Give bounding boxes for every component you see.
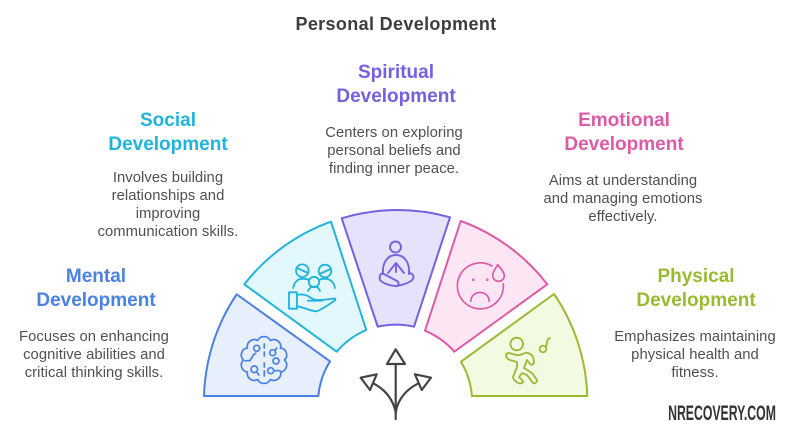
- text: social: improving: [136, 206, 200, 222]
- text: social: [98, 170, 238, 240]
- text: mental: cognitive abilities and: [23, 347, 165, 363]
- heading: physical: [636, 266, 756, 311]
- heading: mental: Mental: [66, 266, 126, 287]
- text: social: communication skills.: [98, 224, 238, 240]
- heading: emotional: Emotional: [578, 110, 670, 131]
- text: spiritual: [325, 125, 463, 177]
- text: emotional: [544, 173, 702, 225]
- panel: spiritual segment: [342, 210, 450, 327]
- heading: mental: Development: [36, 290, 156, 311]
- text: mental: critical thinking skills.: [25, 365, 163, 381]
- text: emotional: Aims at understanding: [549, 173, 697, 189]
- heading: social: [108, 110, 228, 155]
- heading: spiritual: Spiritual: [358, 62, 434, 83]
- icon: running figure with music note: [506, 338, 550, 383]
- text: mental: Focuses on enhancing: [19, 329, 169, 345]
- panel: emotional segment: [425, 221, 547, 352]
- heading: emotional: [564, 110, 684, 155]
- icon: brain: [241, 337, 287, 383]
- text: spiritual: Centers on exploring: [325, 125, 463, 141]
- heading: emotional: Development: [564, 134, 684, 155]
- heading: mental: [36, 266, 156, 311]
- heading: social: Social: [140, 110, 196, 131]
- text: spiritual: personal beliefs and: [327, 143, 461, 159]
- text: social: Involves building: [113, 170, 223, 186]
- text: physical: fitness.: [671, 365, 719, 381]
- heading: spiritual: Development: [336, 86, 456, 107]
- heading: physical: Physical: [657, 266, 735, 287]
- heading: physical: Development: [636, 290, 756, 311]
- text: physical: [614, 329, 776, 381]
- panel: mental segment: [204, 294, 330, 396]
- text: emotional: and managing emotions: [544, 191, 702, 207]
- icon: three-way arrow: [361, 349, 431, 419]
- title: Personal Development: [295, 14, 497, 34]
- icon: meditation: [380, 242, 413, 286]
- logo text: NRECOVERY.COM: [668, 401, 776, 425]
- text: physical: Emphasizes maintaining: [614, 329, 776, 345]
- text: spiritual: finding inner peace.: [329, 161, 459, 177]
- panel: physical segment: [461, 294, 587, 396]
- heading: spiritual: [336, 62, 456, 107]
- text: physical: physical health and: [631, 347, 759, 363]
- heading: social: Development: [108, 134, 228, 155]
- text: mental: [19, 329, 169, 381]
- icon: sad face with drop: [457, 263, 504, 309]
- text: emotional: effectively.: [588, 209, 658, 225]
- panel: social segment: [244, 222, 366, 352]
- icon: people in hand: [289, 264, 335, 311]
- text: social: relationships and: [112, 188, 224, 204]
